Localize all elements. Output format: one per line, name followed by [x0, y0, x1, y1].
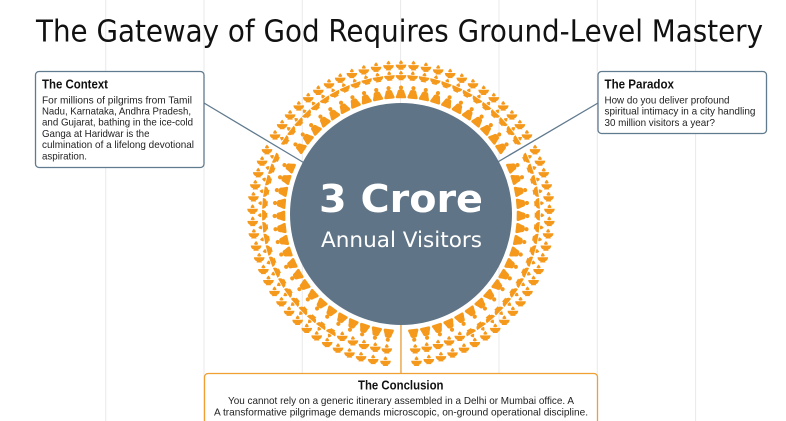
ring: middle radial lamps — [258, 71, 544, 354]
panel: the context — [36, 72, 204, 168]
text: context body — [42, 94, 194, 162]
text: context body: Nadu, Karnataka, Andhra Pradesh, — [42, 106, 191, 118]
panel: the paradox — [598, 72, 766, 134]
text: paradox body: How do you deliver profound — [604, 94, 730, 106]
connector: conclusion to circle — [400, 320, 402, 374]
text: context body: aspiration. — [42, 150, 87, 162]
connector: paradox to circle — [496, 103, 598, 163]
heading: the conclusion: The Conclusion — [358, 378, 444, 392]
text: context body: Ganga at Haridwar is the — [42, 128, 150, 140]
ring: inner seated pilgrims — [272, 86, 530, 342]
text: context body: For millions of pilgrims from Tamil — [42, 94, 192, 106]
text: context body: and Gujarat, bathing in the ice-cold — [42, 117, 193, 129]
text: conclusion body — [214, 395, 588, 418]
pilgrim rings — [247, 60, 555, 366]
central circle — [290, 103, 512, 325]
subtitle: Annual Visitors — [321, 228, 482, 252]
text: conclusion body: You cannot rely on a generic itinerary assembled in a Delhi or Mumbai office. A — [228, 395, 574, 407]
text: context body: culmination of a lifelong devotional — [42, 139, 194, 151]
heading: the paradox: The Paradox — [604, 78, 674, 92]
big number: 3 Crore — [319, 177, 483, 222]
text: conclusion body: A transformative pilgrimage demands microscopic, on-ground operational discipline. — [214, 406, 588, 418]
text: paradox body — [604, 94, 756, 129]
text: paradox body: 30 million visitors a year? — [604, 117, 715, 129]
ring: outer upright lamps — [247, 60, 555, 366]
text: paradox body: spiritual intimacy in a city handling — [604, 106, 756, 118]
connector: context to circle — [204, 103, 306, 164]
heading: the context: The Context — [42, 78, 109, 92]
panel: the conclusion — [204, 374, 598, 421]
